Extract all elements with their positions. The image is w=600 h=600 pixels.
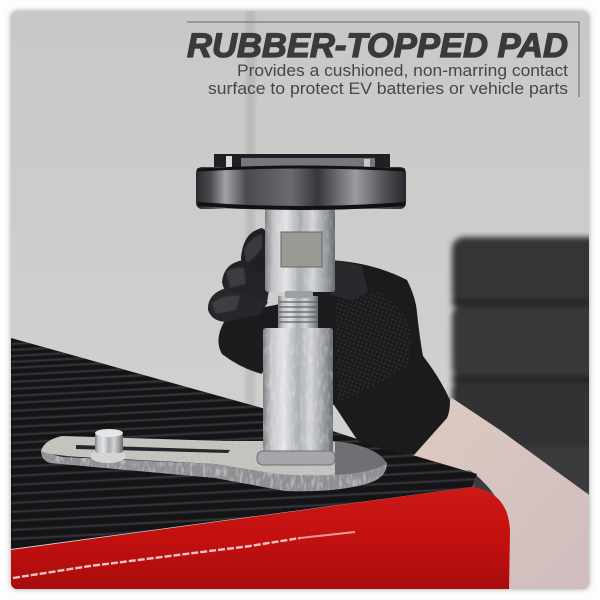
black ribbed mat [11, 320, 480, 549]
plate top [41, 436, 387, 475]
subtitle text: Provides a cushioned, non-marring contact [237, 62, 568, 80]
glove palm [250, 260, 450, 455]
lower cylinder [263, 328, 333, 454]
hex bolt [90, 429, 126, 463]
plate dark end [335, 441, 387, 475]
title: RUBBER-TOPPED PAD [187, 27, 568, 65]
weld ring [257, 451, 335, 465]
glove texture [335, 292, 412, 402]
plate top texture [46, 438, 335, 475]
wall [11, 11, 589, 16]
plate slot [76, 445, 230, 453]
leveling post [257, 206, 335, 465]
callout frame line [187, 22, 579, 97]
pad rim [196, 167, 406, 209]
highlight on red edge [13, 538, 300, 578]
threaded stud [278, 291, 318, 328]
blurred tire stack [452, 237, 600, 496]
wrench flat [281, 232, 322, 267]
upper cylinder streaks [265, 206, 335, 292]
lower cylinder speckle [263, 328, 333, 454]
red cart body [11, 487, 510, 592]
plate side edge [41, 451, 387, 491]
glove [208, 228, 450, 455]
subtitle text: surface to protect EV batteries or vehicle parts [208, 80, 568, 98]
upper cylinder [265, 206, 335, 292]
fingers [208, 228, 270, 374]
thumb [329, 260, 368, 300]
finger highlights [212, 234, 262, 314]
heading callout [187, 22, 579, 98]
forearm [410, 398, 592, 592]
pad top plate [214, 154, 390, 168]
metal base plate [41, 429, 387, 491]
plate side texture [41, 451, 387, 491]
wall seam [246, 11, 255, 411]
subtitle text [208, 62, 568, 98]
rubber-topped pad [196, 154, 406, 209]
